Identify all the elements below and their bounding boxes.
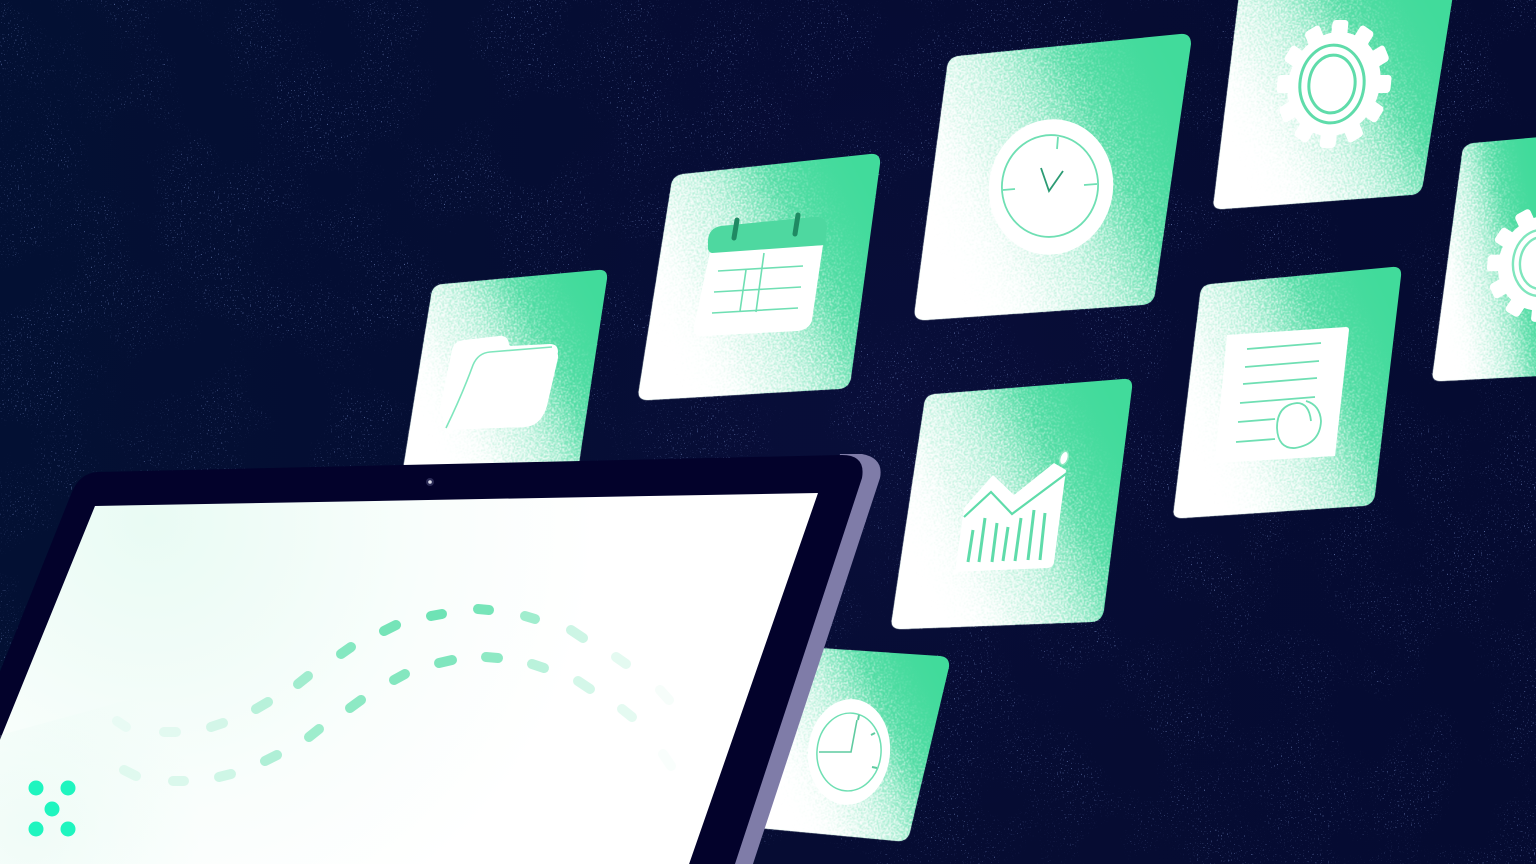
card: document — [1174, 267, 1401, 518]
laptop — [0, 454, 881, 864]
icon: calendar — [694, 215, 827, 336]
card: chart — [892, 379, 1132, 629]
card: gear — [1214, 0, 1453, 209]
icon: small clock — [803, 695, 895, 809]
dashed path: upper — [117, 609, 669, 732]
webcam — [426, 478, 434, 486]
logo: five dots — [28, 780, 76, 836]
card: calendar — [639, 154, 880, 400]
icon: gear — [1270, 20, 1398, 148]
card: folder — [403, 270, 607, 470]
dashed path: lower — [124, 657, 671, 781]
card: clock — [915, 34, 1191, 320]
screen lower glow — [0, 734, 74, 864]
icon: clock — [976, 108, 1126, 266]
laptop bezel — [0, 455, 863, 864]
laptop back edge — [730, 454, 881, 864]
card: small clock — [760, 648, 949, 841]
icon: partial gear — [1481, 204, 1536, 322]
laptop screen — [0, 493, 818, 864]
icon: document — [1215, 327, 1349, 463]
card: partial gear — [1433, 137, 1536, 381]
icon: line and bar chart — [955, 450, 1070, 572]
icon: folder — [440, 336, 558, 430]
